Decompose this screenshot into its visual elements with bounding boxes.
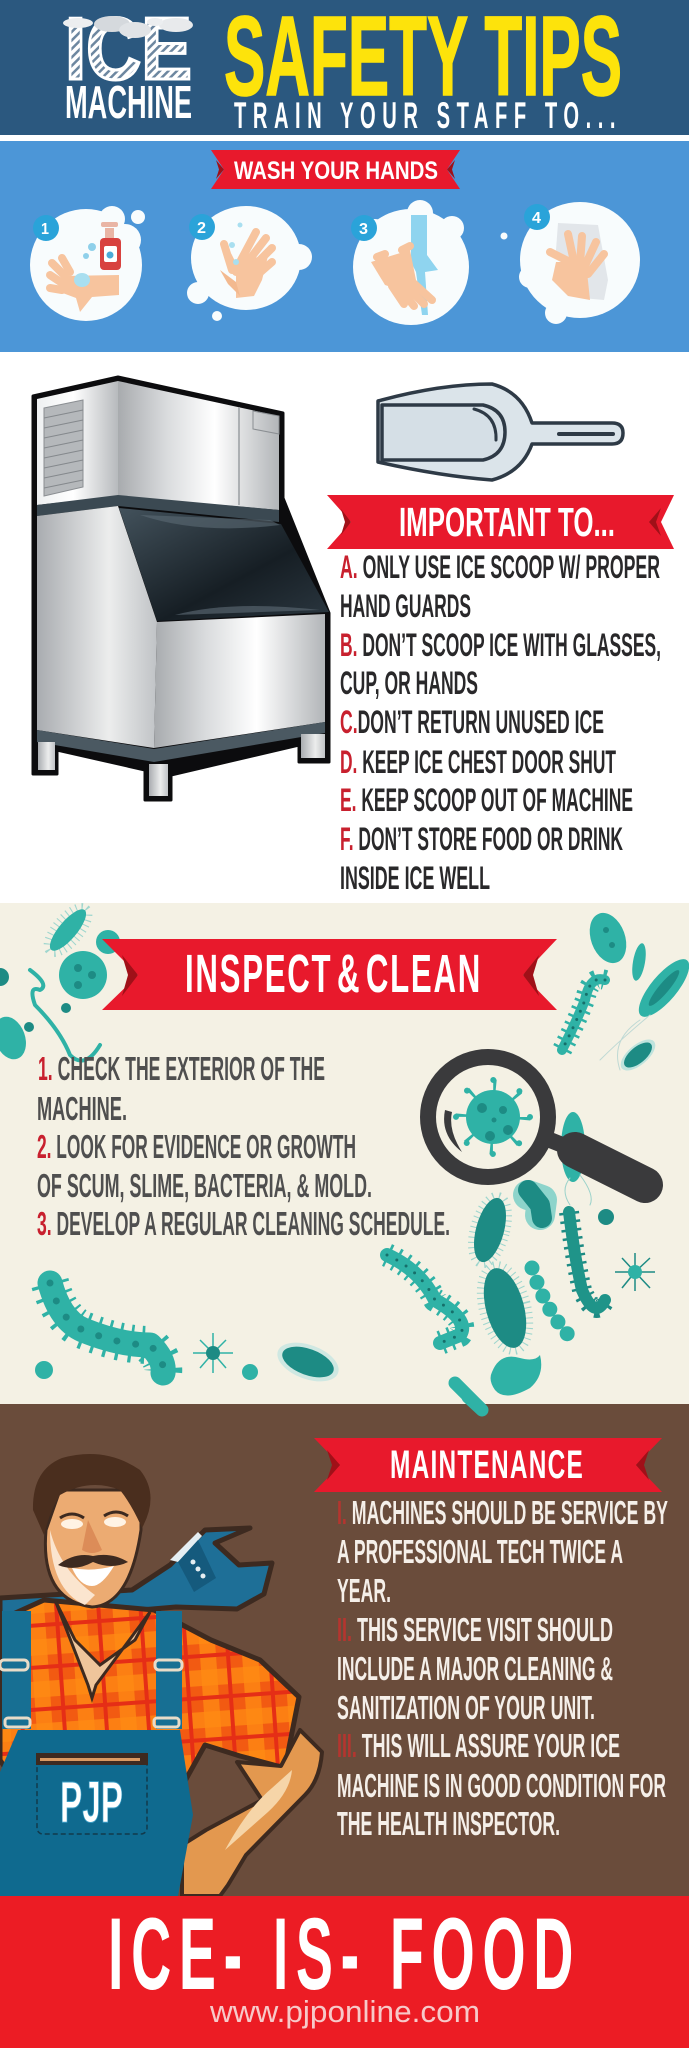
pocket [37,1758,147,1834]
overalls [0,1730,193,1896]
banner: maintenance [314,1438,662,1492]
step 4: dry hands [500,202,640,324]
shirt [0,1600,299,1790]
text: inspect list [37,1050,450,1242]
banner: wash your hands: WASH YOUR HANDS [234,157,438,185]
step 3: rinse under water [351,200,469,325]
text: important list: HAND GUARDS [340,588,471,624]
banner: important to [327,495,674,549]
bacteria top right [562,908,689,1076]
text: important list: INSIDE ICE WELL [340,860,490,896]
icon: ice scoop [378,384,623,480]
website url: www.pjponline.com [209,1994,480,2029]
bacteria lower left [35,1283,344,1389]
text: maintenance list [337,1494,668,1842]
text: inspect list: MACHINE. [37,1090,127,1127]
logo: ice machine: MACHINE [65,76,192,128]
step 2: rub hands [187,206,312,321]
logo: ice machine: ICE [65,0,192,98]
icon: magnifying glass [428,1057,645,1185]
panel: maintenance [0,1397,689,1896]
collar [55,1600,150,1698]
wrench [0,1528,272,1622]
text: inspect list: 2. LOOK FOR EVIDENCE OR GROWTH [37,1128,356,1165]
step 1: soap and hand: 1 [41,221,49,238]
arm [182,1730,322,1896]
step 3: rinse under water: 3 [359,221,368,238]
buckles [0,1660,182,1727]
banner: inspect and clean: INSPECT & CLEAN [185,944,482,1004]
panel: inspect and clean [0,903,689,1410]
bacterium overlapping edge [468,1397,482,1410]
panel: important to [0,352,689,903]
text: inspect list: 1. CHECK THE EXTERIOR OF THE [38,1050,325,1087]
head [33,1454,151,1607]
logo: pjp: PJP [60,1770,123,1835]
straps [2,1611,182,1729]
bacteria top left [0,904,120,1064]
panel: wash your hands [0,141,689,352]
footer band [0,1896,689,2048]
banner: wash your hands [211,150,460,189]
step 2: rub hands: 2 [197,220,206,237]
banner: inspect and clean [102,939,557,1010]
step 1: soap and hand [30,206,145,321]
illustration: mechanic [0,1454,322,1896]
step 4: dry hands: 4 [532,210,541,227]
icon: ice machine [33,377,329,800]
text: inspect list: OF SCUM, SLIME, BACTERIA, & MOLD. [37,1167,372,1204]
text: important list: CUP, OR HANDS [340,665,478,701]
bacteria lower right [387,1112,655,1410]
logo: ice machine [63,0,193,128]
header band [0,0,689,136]
text: maintenance list: YEAR. [337,1572,391,1609]
text: important list [340,549,661,896]
